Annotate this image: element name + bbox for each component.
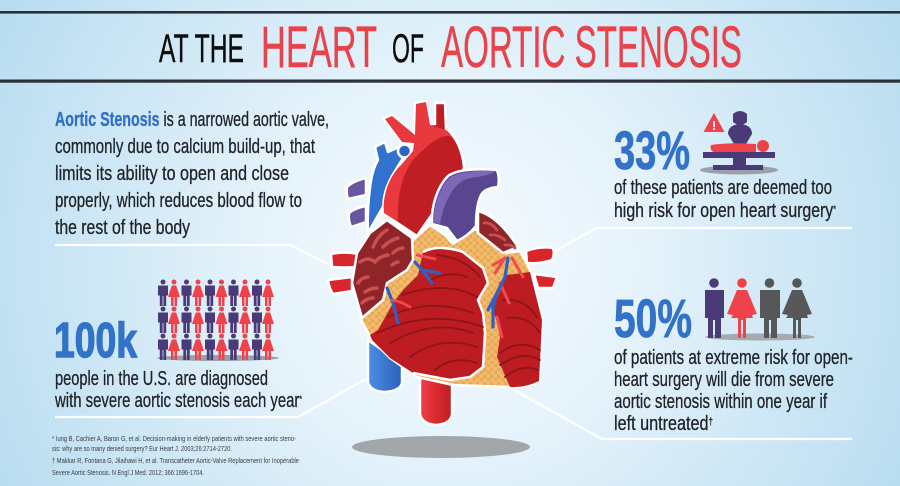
50% caption: heart surgery will die from severe — [614, 369, 834, 391]
footnotes: † Makkar R, Fontana G, Jilaihawi H, et al. Transcatheter Aortic-Valve Replacement for Inoperable — [52, 456, 299, 465]
aorta — [383, 101, 464, 236]
stat: 33%: 33% — [614, 121, 690, 181]
warning triangle: ! — [712, 118, 716, 133]
pulmonary artery — [432, 169, 499, 241]
definition text: the rest of the body — [55, 217, 190, 239]
100k caption: with severe aortic stenosis each year — [55, 390, 383, 412]
50% caption: left untreated — [614, 413, 731, 435]
stat: 100k — [54, 280, 302, 412]
50% caption: † — [708, 417, 713, 428]
100k caption: people in the U.S. are diagnosed — [55, 368, 268, 390]
title: HEART — [261, 15, 377, 80]
title — [159, 15, 742, 80]
stat: 50% — [614, 278, 853, 435]
definition text: properly, which reduces blood flow to — [55, 190, 302, 212]
surgeon icon — [700, 111, 778, 174]
people grid icon — [157, 280, 279, 361]
right ventricle — [493, 272, 542, 387]
descending aorta — [420, 374, 452, 425]
right atrium — [352, 220, 413, 318]
heart illustration — [328, 101, 557, 425]
stat: 50%: 50% — [614, 289, 692, 349]
stat: 100k: 100k — [54, 314, 138, 368]
definition text: commonly due to calcium build-up, that — [55, 136, 315, 158]
left ventricle — [370, 248, 488, 380]
definition text: limits its ability to open and close — [55, 163, 289, 185]
fat tissue — [360, 225, 542, 387]
title: AT THE — [159, 27, 244, 71]
footnotes: sis: why are so many denied surgery? Eur Heart J. 2003;26:2714-2720. — [52, 444, 232, 453]
33% caption: high risk for open heart surgery — [614, 200, 891, 222]
100k caption: * — [299, 394, 302, 404]
pulmonary veins — [347, 178, 366, 227]
footnotes: * Iung B, Cachier A, Baron G, et al. Decision-making in elderly patients with severe aortic steno- — [52, 434, 296, 443]
leader lines — [55, 228, 852, 439]
33% caption — [614, 177, 836, 222]
heart shadow — [352, 436, 530, 458]
stat: 33% — [614, 111, 836, 222]
left atrium — [478, 211, 518, 253]
33% caption: * — [833, 204, 836, 214]
title band — [0, 11, 900, 83]
50% caption — [614, 347, 853, 435]
definition text — [55, 109, 329, 239]
definition text: Aortic Stenosis is a narrowed aortic valve, — [55, 109, 329, 131]
four people icon — [705, 278, 815, 340]
superior vena cava — [368, 142, 411, 233]
footnotes — [52, 434, 299, 477]
50% caption: aortic stenosis within one year if — [614, 391, 827, 413]
100k caption — [54, 368, 302, 412]
coronary vessels — [387, 255, 523, 337]
vessel stubs — [328, 247, 557, 294]
footnotes: Severe Aortic Stenosis. N Engl J Med. 2012; 366:1696-1704. — [52, 468, 204, 477]
inferior vena cava — [368, 340, 402, 392]
title: OF — [392, 27, 424, 71]
33% caption: of these patients are deemed too — [614, 177, 832, 199]
